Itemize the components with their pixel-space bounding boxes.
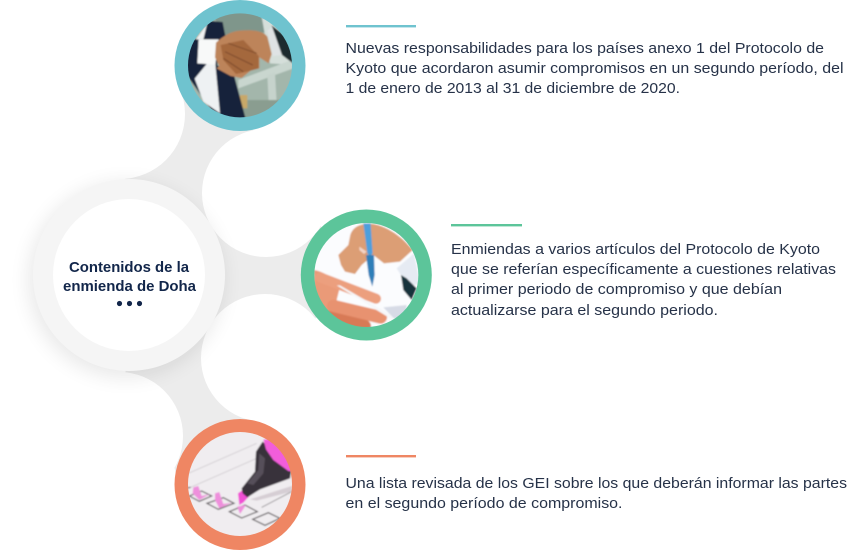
node 2 text: al primer periodo de compromiso y que debían [451,282,782,298]
node 3 text: Una lista revisada de los GEI sobre los que deberán informar las partes [346,476,847,492]
three dots [117,301,142,306]
node 1 text: Nuevas responsabilidades para los países anexo 1 del Protocolo de [346,41,824,57]
node 1: handshake photo [174,0,306,131]
central title: enmienda de Doha [63,278,197,295]
central title: Contenidos de la [69,259,190,276]
node 2 text [451,242,836,319]
node 2 accent bar [451,224,522,226]
central title [63,259,197,295]
node 3 accent bar [346,455,416,457]
node 1 text [346,41,844,97]
node 1 text: Kyoto que acordaron asumir compromisos en un segundo período, del [346,61,844,77]
connector network [55,49,366,500]
node 2: pens and hands photo [301,210,432,340]
node 2 text: Enmiendas a varios artículos del Protocolo de Kyoto [451,242,820,258]
node 3 text [346,476,847,512]
node 3: highlighter checklist photo [174,419,306,550]
node 3 text: en el segundo período de compromiso. [346,496,622,512]
node 2 text: actualizarse para el segundo periodo. [451,303,718,319]
central node [29,179,225,377]
node 1 text: 1 de enero de 2013 al 31 de diciembre de 2020. [346,81,680,97]
node 2 text: que se referían específicamente a cuestiones relativas [451,262,836,278]
node 1 accent bar [346,25,416,27]
